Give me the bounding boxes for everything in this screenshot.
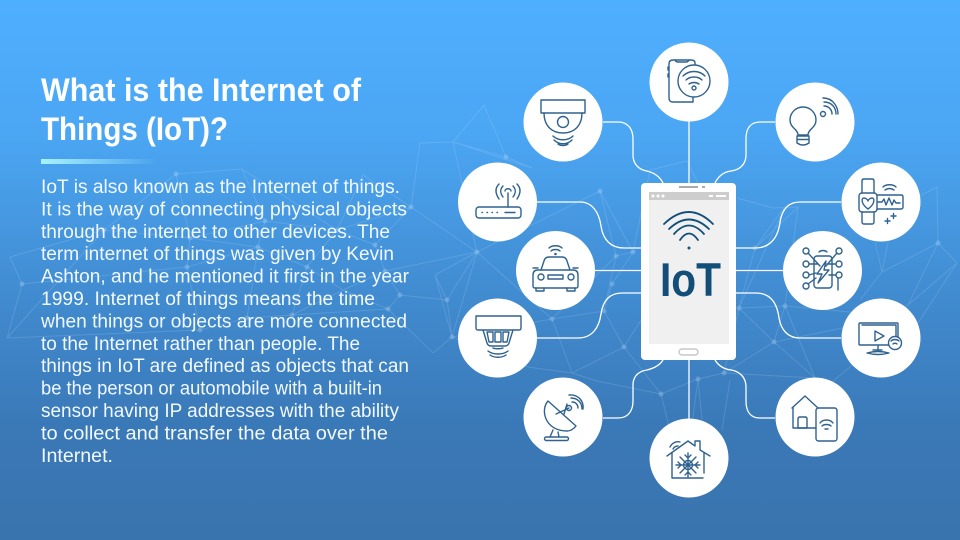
body text: things in IoT are defined as objects that can (41, 356, 409, 377)
body text: when things or objects are more connected (40, 312, 407, 332)
icon: light bulb (790, 98, 838, 145)
body text: to collect and transfer the data over the (41, 424, 388, 444)
title: What is the Internet of (41, 72, 361, 108)
central phone (641, 183, 736, 360)
body text (40, 177, 410, 467)
accent bar under title (41, 159, 157, 164)
node circles (458, 42, 920, 498)
icon: smartwatch with heartbeat (859, 179, 903, 224)
body text: Internet. (41, 446, 113, 467)
body text: IoT is also known as the Internet of things. (41, 177, 400, 198)
body text: be the person or automobile with a built-in (41, 378, 382, 400)
body text: term internet of things was given by Kevin (41, 244, 394, 265)
icon: wifi router (476, 184, 521, 218)
body text: through the internet to other devices. The (41, 222, 390, 243)
icon: smart TV with wifi (859, 323, 902, 354)
body text: It is the way of connecting physical objects (41, 200, 407, 220)
body text: Ashton, and he mentioned it first in the year (41, 266, 410, 288)
IoT logo text: IoT (660, 253, 721, 306)
body text: to the Internet rather than people. The (41, 334, 360, 355)
title (41, 72, 361, 147)
icon: smart home with phone (792, 396, 837, 441)
icon: house with snowflake (667, 441, 710, 478)
background network mesh (7, 105, 957, 440)
icon: smartphone with wifi (668, 60, 710, 102)
icon: smoke detector (476, 316, 521, 357)
body text: 1999. Internet of things means the time (41, 289, 375, 310)
icon: phone circuit (803, 248, 842, 290)
background network nodes (20, 154, 940, 396)
title: Things (IoT)? (41, 111, 228, 147)
icon: security camera (541, 100, 585, 146)
icon: satellite dish (544, 395, 583, 440)
icon: car with wifi (533, 246, 578, 291)
icon: wifi on phone (664, 212, 713, 249)
connector lines (537, 121, 841, 419)
body text: sensor having IP addresses with the ability (41, 401, 399, 422)
